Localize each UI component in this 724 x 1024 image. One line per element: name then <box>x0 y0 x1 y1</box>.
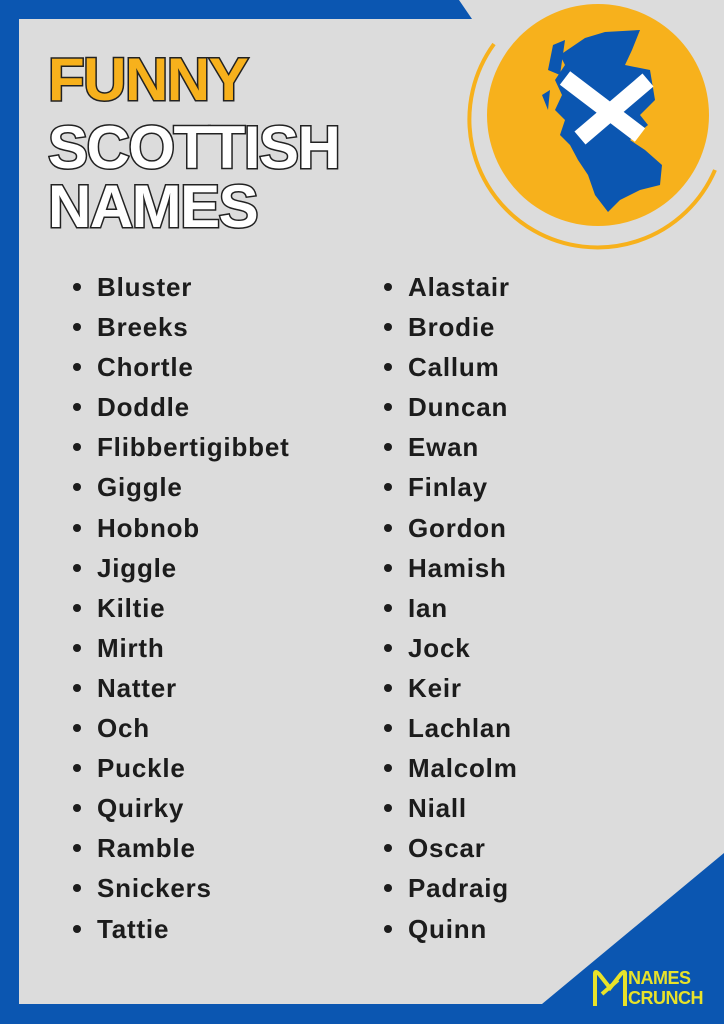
logo <box>593 968 703 1008</box>
icon: scotland map <box>542 30 662 212</box>
list: column 1: Hobnob <box>97 513 200 543</box>
list: column 2: Gordon <box>408 513 507 543</box>
list: column 1: Giggle <box>97 472 183 502</box>
list: column 2: Finlay <box>408 472 488 502</box>
list: column 1 <box>73 272 290 944</box>
list: column 2: Padraig <box>408 873 509 903</box>
list: column 1: Ramble <box>97 833 196 863</box>
list: column 1: Doddle <box>97 392 190 422</box>
list: column 1: Puckle <box>97 753 186 783</box>
list: column 2: Lachlan <box>408 713 512 743</box>
list: column 2 <box>384 272 518 944</box>
list: column 2: Keir <box>408 673 462 703</box>
list: column 1: Quirky <box>97 793 184 823</box>
list: column 2: Oscar <box>408 833 486 863</box>
list: column 1: Natter <box>97 673 177 703</box>
list: column 1: Snickers <box>97 873 212 903</box>
text: FUNNY <box>48 46 247 113</box>
list: column 1: Jiggle <box>97 553 177 583</box>
list: column 2: Alastair <box>408 272 510 302</box>
list: column 2: Quinn <box>408 914 487 944</box>
list: column 1: Chortle <box>97 352 194 382</box>
list: column 1: Kiltie <box>97 593 165 623</box>
list: column 1: Breeks <box>97 312 189 342</box>
list: column 1: Tattie <box>97 914 169 944</box>
map emblem <box>467 4 717 250</box>
list: column 1: Och <box>97 713 150 743</box>
list: column 1: Mirth <box>97 633 165 663</box>
logo: NAMES <box>628 968 691 988</box>
list: column 2: Malcolm <box>408 753 518 783</box>
title <box>48 46 339 240</box>
logo: CRUNCH <box>628 988 703 1008</box>
text: SCOTTISH <box>48 114 339 181</box>
list: column 2: Ewan <box>408 432 479 462</box>
list: column 2: Niall <box>408 793 467 823</box>
list: column 2: Ian <box>408 593 448 623</box>
list: column 1: Bluster <box>97 272 192 302</box>
list: column 2: Duncan <box>408 392 508 422</box>
list: column 2: Brodie <box>408 312 495 342</box>
text: NAMES <box>48 173 257 240</box>
list: column 1: Flibbertigibbet <box>97 432 290 462</box>
list: column 2: Hamish <box>408 553 507 583</box>
list: column 2: Jock <box>408 633 470 663</box>
list: column 2: Callum <box>408 352 499 382</box>
